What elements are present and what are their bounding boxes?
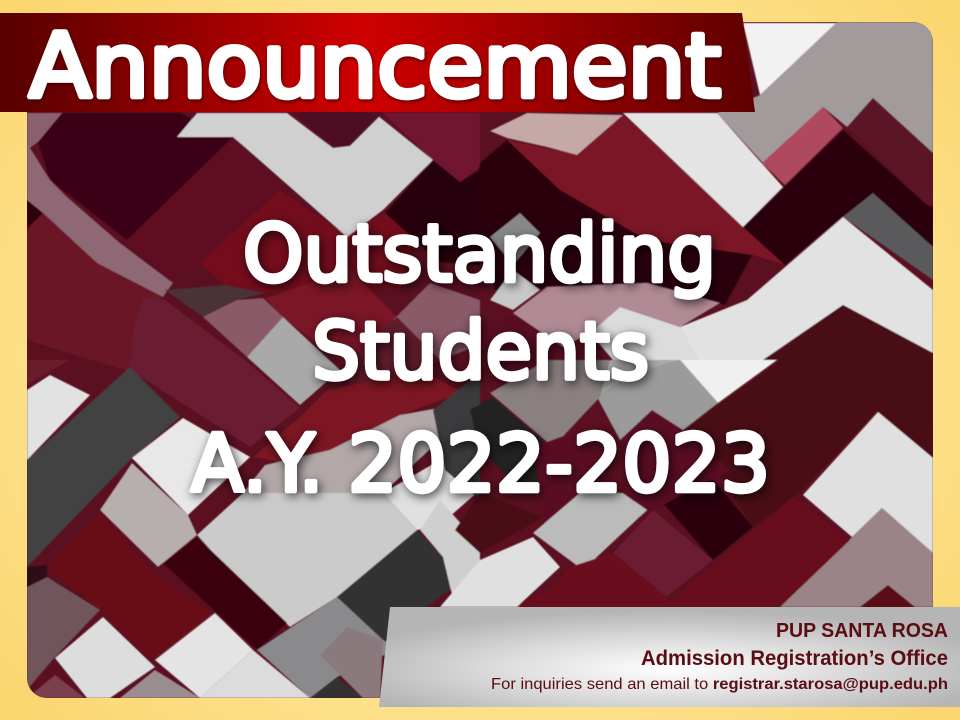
panel: footer contact block xyxy=(379,607,960,707)
title line: Students: Students xyxy=(312,306,649,398)
footer line: office: Admission Registration’s Office xyxy=(641,647,948,670)
footer line: inquiries: For inquiries send an email to registrar.starosa@pup.edu.ph xyxy=(491,676,948,693)
banner: red ribbon xyxy=(0,13,755,112)
title block xyxy=(191,208,770,510)
title line: academic year: A.Y. 2022-2023 xyxy=(191,418,770,510)
title line: Outstanding: Outstanding xyxy=(243,208,716,300)
heading: Announcement: Announcement xyxy=(29,14,721,118)
footer line: PUP SANTA ROSA: PUP SANTA ROSA xyxy=(776,620,948,642)
